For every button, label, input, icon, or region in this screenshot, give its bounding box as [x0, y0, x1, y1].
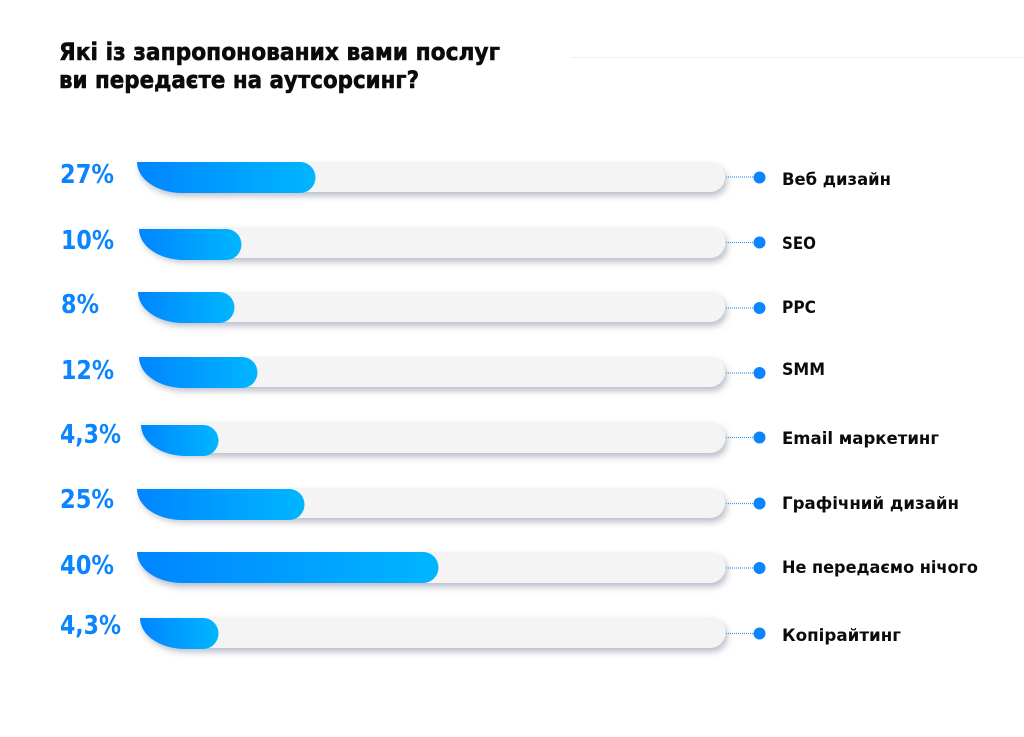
row: Веб дизайн 27% — [60, 160, 891, 193]
row: Веб дизайн 27%: Веб дизайн — [782, 170, 891, 190]
row: Не передаємо нічого 40% — [60, 551, 978, 583]
row: Графічний дизайн 25% — [60, 485, 959, 520]
row: Копірайтинг 4,3% — [60, 611, 901, 649]
row: PPC 8%: 8% — [61, 290, 99, 320]
row: PPC 8% — [61, 290, 816, 323]
row: Копірайтинг 4,3%: Копірайтинг — [782, 626, 901, 646]
row: Копірайтинг 4,3%: 4,3% — [60, 611, 121, 641]
row: SMM 12%: 12% — [61, 356, 114, 386]
row: SMM 12%: SMM — [782, 360, 825, 380]
row: Email маркетинг 4,3% — [60, 420, 939, 456]
title: ви передаєте на аутсорсинг? — [59, 66, 419, 94]
row: Графічний дизайн 25%: 25% — [60, 485, 114, 515]
row: SEO 10%: SEO — [782, 234, 816, 254]
title — [59, 38, 500, 94]
row: Веб дизайн 27%: 27% — [60, 160, 114, 190]
row: Графічний дизайн 25%: Графічний дизайн — [782, 494, 959, 514]
row: Email маркетинг 4,3%: 4,3% — [60, 420, 121, 450]
row: SEO 10%: 10% — [61, 226, 114, 256]
row: PPC 8%: PPC — [782, 298, 816, 318]
row: SEO 10% — [61, 226, 816, 260]
row: Email маркетинг 4,3%: Email маркетинг — [782, 429, 939, 449]
title: Які із запропонованих вами послуг — [59, 38, 500, 66]
row: Не передаємо нічого 40%: Не передаємо нічого — [782, 558, 978, 578]
row: Не передаємо нічого 40%: 40% — [60, 551, 114, 581]
row: SMM 12% — [61, 356, 825, 388]
